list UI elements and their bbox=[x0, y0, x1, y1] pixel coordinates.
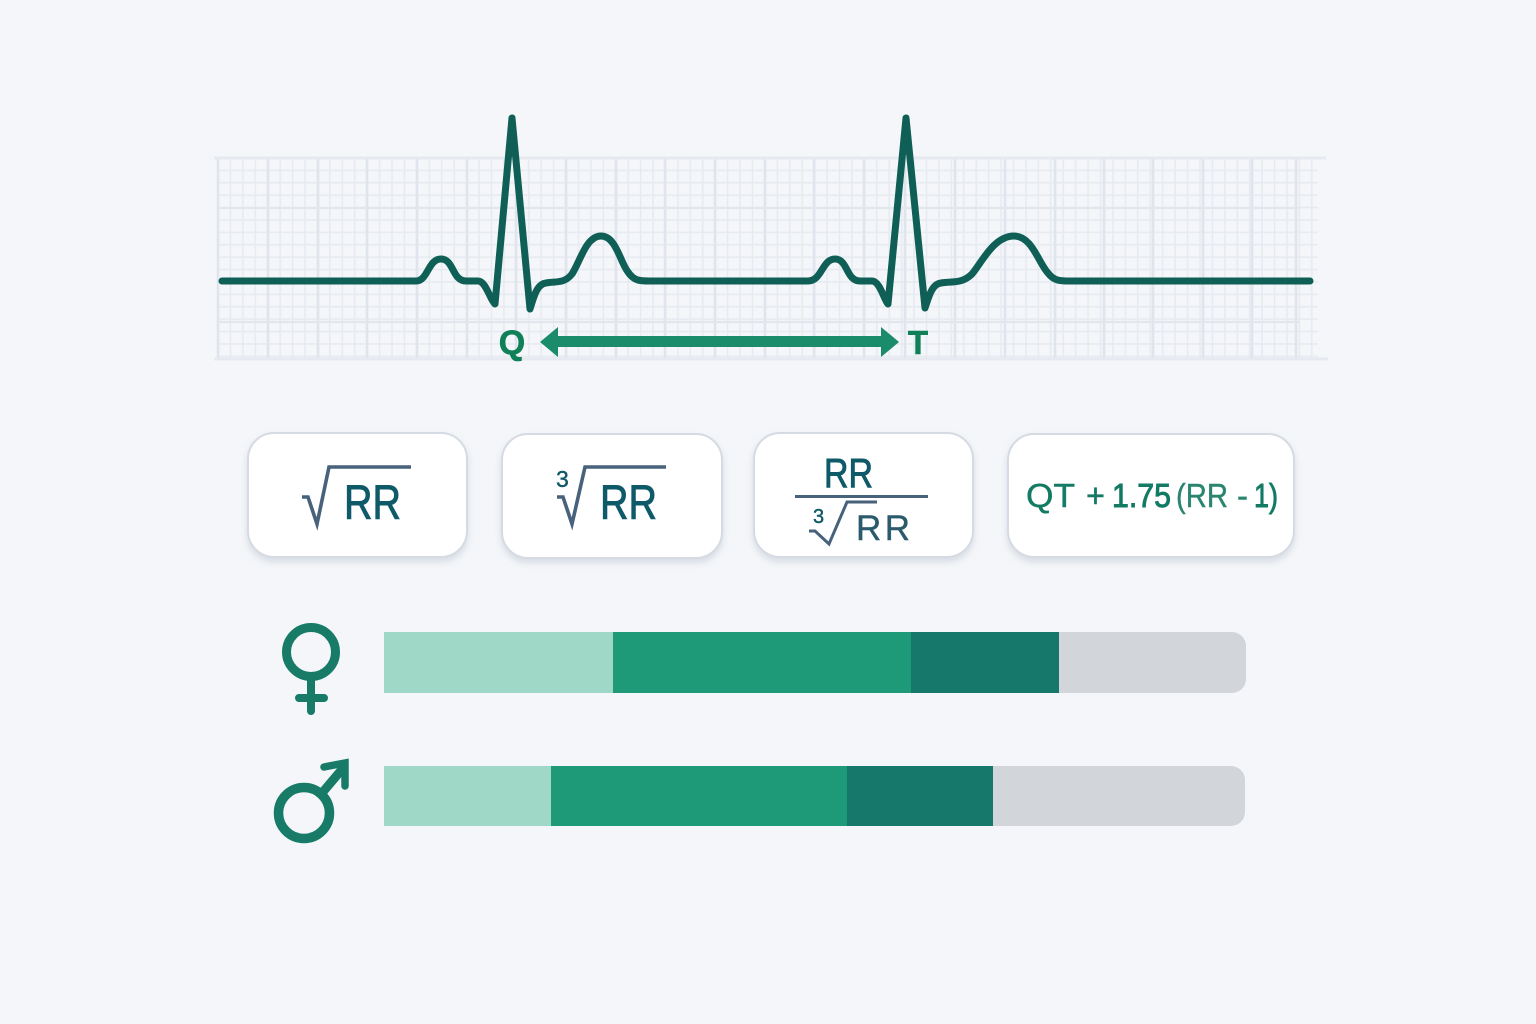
card: cube root of RR: RR bbox=[600, 477, 657, 530]
card: QT + 1.75(RR - 1): QT bbox=[1026, 477, 1075, 514]
card: QT + 1.75(RR - 1): (RR bbox=[1176, 477, 1228, 514]
card: QT + 1.75(RR - 1) bbox=[1008, 434, 1294, 557]
card: RR over cube root of RR bbox=[754, 433, 973, 557]
card: QT + 1.75(RR - 1): 1) bbox=[1254, 477, 1278, 514]
card: QT + 1.75(RR - 1): - bbox=[1237, 477, 1248, 514]
bar: male bbox=[384, 766, 1245, 826]
ECG grid paper bbox=[214, 158, 1328, 359]
card: RR over cube root of RR: RR bbox=[856, 509, 910, 548]
ECG waveform trace bbox=[222, 118, 1310, 309]
icon: male symbol bbox=[278, 763, 345, 838]
card: RR over cube root of RR: RR bbox=[824, 450, 873, 496]
card: RR over cube root of RR: 3 bbox=[813, 506, 824, 528]
card: square root of RR bbox=[248, 433, 467, 557]
card: QT + 1.75(RR - 1): 1.75 bbox=[1112, 477, 1171, 514]
label: Q: Q bbox=[499, 324, 525, 362]
icon: female symbol bbox=[286, 628, 336, 711]
card: cube root of RR bbox=[502, 434, 722, 558]
card: square root of RR: RR bbox=[344, 477, 401, 530]
QT interval double arrow bbox=[540, 327, 899, 357]
formula cards row bbox=[248, 433, 1294, 558]
bar: female bbox=[384, 632, 1246, 693]
label: T: T bbox=[908, 324, 928, 361]
card: QT + 1.75(RR - 1): + bbox=[1086, 477, 1105, 514]
card: cube root of RR: 3 bbox=[556, 466, 569, 492]
ECG chart bbox=[214, 118, 1328, 362]
